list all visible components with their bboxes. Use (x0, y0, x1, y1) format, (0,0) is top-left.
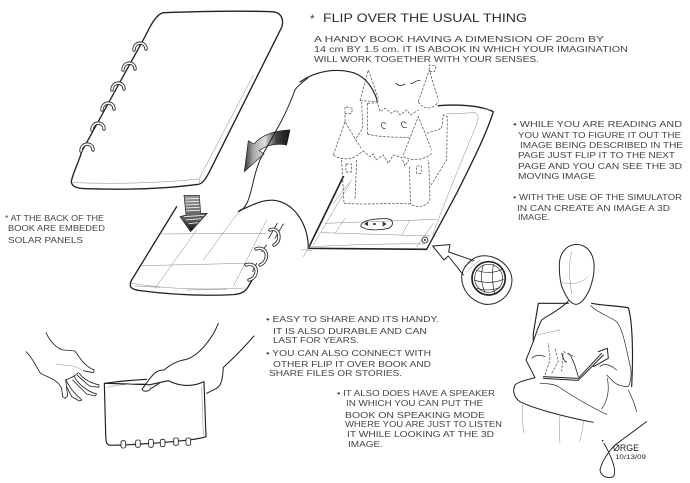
right hand (142, 323, 254, 393)
text block: speaker note: WHERE YOU ARE JUST TO LISTEN (345, 420, 502, 429)
text block: solar panels note: SOLAR PANELS (8, 236, 83, 245)
text block: 3D moving image notes: PAGE JUST FLIP IT TO THE NEXT (518, 151, 675, 160)
illustration: seated figure reading (514, 244, 637, 443)
text block: solar panels note: * AT THE BACK OF THE (5, 214, 104, 223)
castle (333, 65, 447, 206)
text block: 3D moving image notes: IN CAN CREATE AN IMAGE A 3D (517, 204, 670, 213)
text block: book description: A HANDY BOOK HAVING A DIMENSION OF 20cm BY (314, 35, 605, 44)
text block: book description: 14 cm BY 1.5 cm. IT IS ABOOK IN WHICH YOUR IMAGINATION (314, 45, 628, 54)
head (559, 244, 594, 304)
text block: 3D moving image notes: PAGE AND YOU CAN SEE THE 3D (518, 162, 682, 171)
signature (600, 422, 647, 478)
arc passing behind the castle (300, 70, 377, 101)
text block: speaker note: • IT ALSO DOES HAVE A SPEAKER (337, 389, 495, 398)
text block: sharing notes: • YOU CAN ALSO CONNECT WITH (266, 349, 431, 358)
text block: speaker note (337, 389, 502, 449)
torso and seated leg (514, 301, 593, 422)
signature: ØRGE (613, 443, 639, 453)
text block: 3D moving image notes: IMAGE BEING DESCRIBED IN THE (520, 141, 683, 150)
text block: 3D moving image notes (513, 120, 683, 222)
illustration: hands holding the book (26, 323, 254, 448)
icon: curved flip arrow (244, 130, 290, 172)
illustration: back of book with solar panels (130, 207, 283, 295)
text block: speaker note: IN WHICH YOU CAN PUT THE (346, 399, 483, 408)
illustration: closed book with ring binding (71, 11, 283, 189)
text block: 3D moving image notes: YOU WANT TO FIGURE IT OUT THE (518, 131, 681, 140)
text block: sharing notes (266, 315, 439, 378)
connector lines between book and tablet (238, 77, 308, 248)
text block: speaker note: IT WHILE LOOKING AT THE 3D (347, 430, 494, 439)
book in hands (104, 379, 206, 448)
text block: speaker note: BOOK ON SPEAKING MODE (345, 411, 485, 420)
open book with castle (543, 343, 608, 380)
illustration: tablet with 3D castle (300, 65, 493, 257)
icon: down arrow between the books (180, 195, 207, 232)
text block: 3D moving image notes: IMAGE. (518, 213, 550, 222)
title: * (310, 12, 315, 26)
binding rings (81, 43, 146, 151)
text block: sharing notes: LAST FOR YEARS. (273, 336, 359, 345)
binding rings (246, 229, 279, 280)
text block: book description (314, 35, 628, 64)
text block: solar panels note: BOOK ARE EMBEDED (8, 224, 105, 233)
tablet body (302, 105, 493, 257)
callout: magnified camera lens on the tablet (433, 245, 512, 304)
signature: 10/13/09 (615, 454, 646, 461)
text block: sharing notes: • EASY TO SHARE AND ITS HANDY. (266, 315, 439, 324)
text block: book description: WILL WORK TOGETHER WITH YOUR SENSES. (314, 55, 539, 64)
text block: solar panels note (5, 214, 105, 245)
text block: 3D moving image notes: • WHILE YOU ARE READING AND (513, 120, 682, 129)
text block: sharing notes: SHARE FILES OR STORIES. (269, 369, 402, 378)
text block: sharing notes: IT IS ALSO DURABLE AND CAN (273, 327, 427, 336)
left hand (26, 333, 99, 401)
text block: 3D moving image notes: • WITH THE USE OF THE SIMULATOR (513, 193, 682, 202)
text block: 3D moving image notes: MOVING IMAGE (518, 172, 595, 181)
title: FLIP OVER THE USUAL THING (323, 11, 527, 25)
chair (533, 303, 632, 387)
text block: sharing notes: OTHER FLIP IT OVER BOOK AND (273, 360, 431, 369)
text block: speaker note: IMAGE. (348, 440, 383, 449)
